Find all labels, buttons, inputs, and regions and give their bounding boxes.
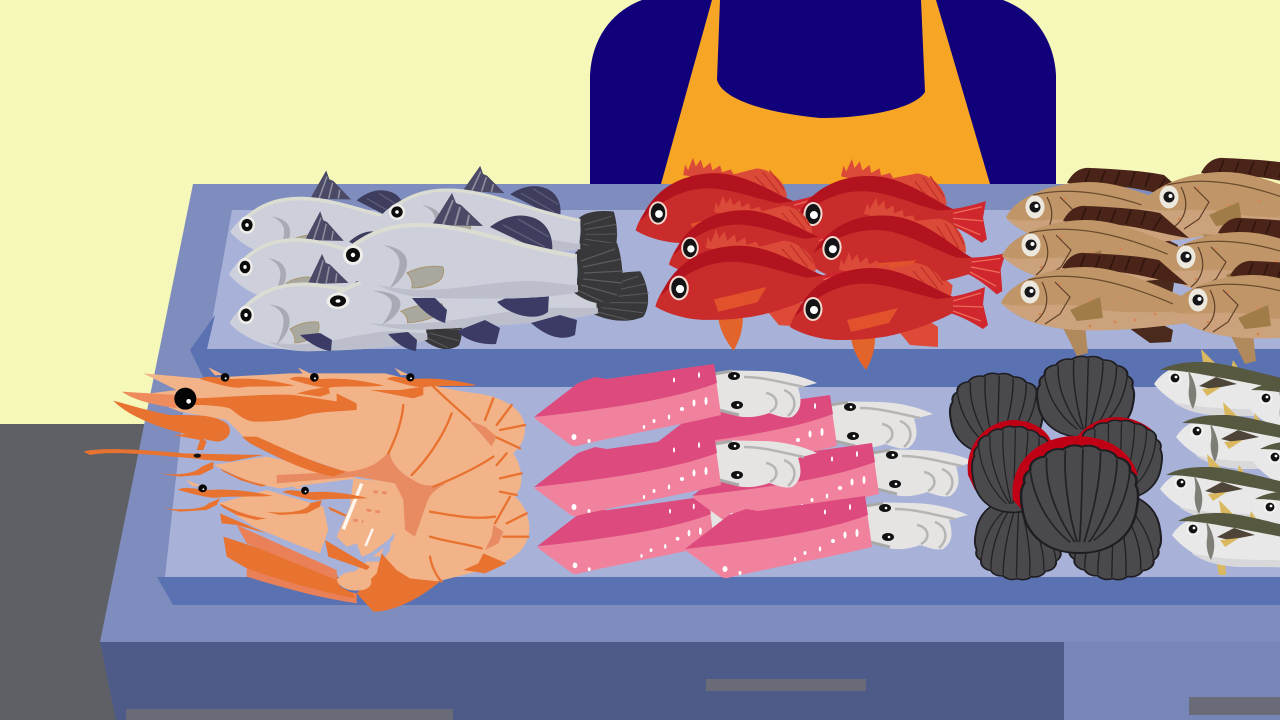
scallop group xyxy=(950,356,1162,580)
fish: lower left xyxy=(226,247,464,360)
leg marks xyxy=(353,492,390,522)
yellowtail group xyxy=(1154,349,1280,575)
scallop back left xyxy=(950,373,1043,455)
body segment lines xyxy=(388,383,528,582)
tail tip xyxy=(463,553,507,573)
white leg streak xyxy=(342,483,374,547)
tail fan salmon base xyxy=(247,568,357,603)
shrimp small heads xyxy=(178,367,477,500)
counter front xyxy=(100,642,1280,720)
lower tray lip xyxy=(157,577,1280,605)
red fish 2 xyxy=(787,156,991,284)
lower tail fan xyxy=(325,540,370,570)
squid 2 xyxy=(650,395,933,477)
scallop middle right xyxy=(1076,420,1162,499)
upper shrimp heads body xyxy=(137,373,529,589)
drawer handle centre xyxy=(706,679,866,691)
squid group xyxy=(534,364,975,578)
vendor body xyxy=(590,0,1056,184)
brown fish middle left xyxy=(1002,206,1236,309)
counter xyxy=(100,184,1280,720)
big eye highlight xyxy=(186,399,191,404)
squid 4 xyxy=(692,443,975,525)
peach knuckle xyxy=(337,571,371,591)
small head mid centre xyxy=(282,482,368,500)
vendor figure xyxy=(590,0,1056,184)
red fish 1 xyxy=(636,158,828,272)
red fish 4 xyxy=(800,188,1014,336)
brown fish group xyxy=(1001,158,1280,364)
brown fish front left xyxy=(1001,253,1235,356)
red fish 3 xyxy=(669,196,851,304)
big head lower xyxy=(113,401,230,442)
big head band xyxy=(190,395,357,422)
gray fish group xyxy=(226,162,650,360)
fish: lower centre xyxy=(311,231,650,341)
drawer handle left xyxy=(126,709,453,720)
tail fan light xyxy=(237,525,337,580)
counter top xyxy=(100,184,1280,642)
brown fish middle right xyxy=(1157,218,1280,321)
fish: large front xyxy=(332,193,623,303)
tail fan upper xyxy=(220,513,267,533)
brown fish top right xyxy=(1140,158,1280,261)
big rostrum light xyxy=(122,392,177,408)
yellowtail 6 xyxy=(1249,478,1280,547)
yellowtail 2 xyxy=(1245,369,1280,438)
brown fish top left xyxy=(1006,168,1240,271)
counter right panel xyxy=(1064,642,1280,720)
scallop middle left xyxy=(972,426,1054,512)
squid 5 xyxy=(537,496,806,574)
brown fish front right xyxy=(1169,261,1280,364)
apron xyxy=(661,0,990,184)
yellowtail 7 xyxy=(1172,500,1280,569)
long strip xyxy=(242,437,347,477)
squid 3 xyxy=(534,434,817,516)
scallop red front xyxy=(1012,436,1138,510)
squid 1 xyxy=(534,364,817,446)
fish: upper right xyxy=(378,162,620,260)
purple fins xyxy=(300,288,577,351)
scallop front xyxy=(1021,445,1138,553)
red fish group xyxy=(636,156,1014,370)
scallop bottom right xyxy=(1068,494,1161,580)
yellowtail 1 xyxy=(1154,349,1280,418)
scallop bottom left xyxy=(975,498,1063,580)
scallop red right xyxy=(1075,417,1152,445)
lower tray xyxy=(165,387,1280,577)
yellowtail tail fin xyxy=(1216,560,1226,575)
dark floor xyxy=(0,424,300,720)
lower shrimp bodies xyxy=(213,457,357,553)
small head right xyxy=(387,368,477,387)
upper tray lip xyxy=(190,315,1280,387)
big tail base xyxy=(357,553,440,612)
yellowtail 5 xyxy=(1160,454,1280,523)
mid eye xyxy=(194,454,201,458)
claws xyxy=(158,387,423,520)
red fish 6 xyxy=(790,252,988,370)
scallop red left xyxy=(968,420,1052,490)
shrimp group xyxy=(83,367,529,612)
tray gap xyxy=(327,532,392,562)
leg comb xyxy=(337,478,406,557)
red fish 5 xyxy=(655,229,859,351)
yellowtail 3 xyxy=(1176,402,1280,471)
tail fan xyxy=(223,537,355,598)
drawer handle right xyxy=(1189,697,1280,715)
fish: upper left xyxy=(230,170,463,268)
body joint xyxy=(277,450,447,537)
big eye xyxy=(174,388,196,410)
small head mid left xyxy=(178,479,273,498)
small head centre xyxy=(289,367,384,388)
fish: middle left xyxy=(229,211,450,311)
scallop back right xyxy=(1037,356,1134,438)
small head left xyxy=(200,367,295,388)
tail joints xyxy=(468,420,503,550)
upper tray xyxy=(207,210,1280,349)
squid 6 xyxy=(685,496,968,578)
yellowtail 4 xyxy=(1254,428,1280,497)
long antenna xyxy=(83,449,263,462)
